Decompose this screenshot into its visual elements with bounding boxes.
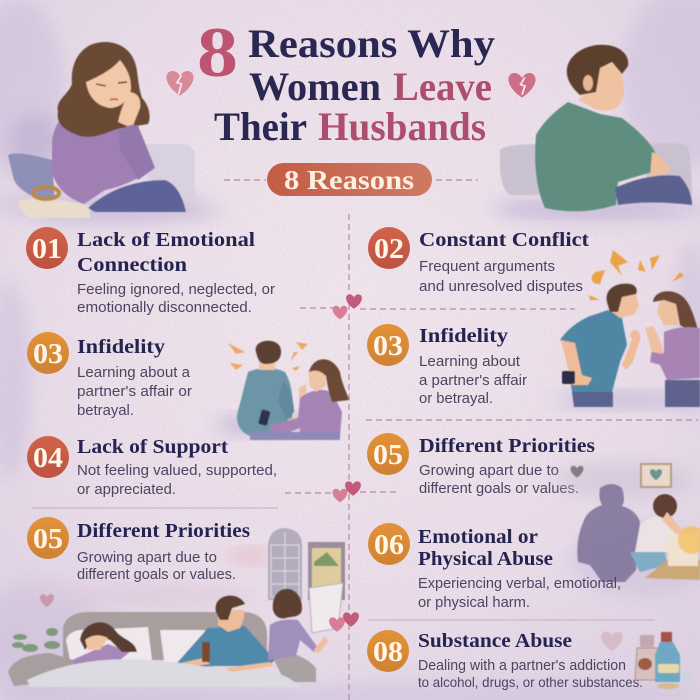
reason 03 left: 03: [33, 339, 63, 370]
illustration: couple with phone: [215, 341, 349, 440]
reason 03 right: Learning about: [419, 354, 520, 370]
decorative hearts: [329, 294, 362, 632]
reason 05 right: 05: [373, 440, 403, 471]
title: [197, 14, 495, 149]
reason 06: 06: [374, 530, 404, 561]
illustration: man on sofa: [500, 45, 692, 216]
pill: 8 Reasons: 8 Reasons: [284, 165, 414, 195]
reason 06: Physical Abuse: [418, 548, 553, 570]
reason 03 left: Infidelity: [77, 336, 166, 358]
reason 08: [367, 630, 643, 690]
illustration: shadow figure and upset woman: [555, 462, 700, 582]
title: Husbands: [318, 104, 486, 149]
reason 05 left: different goals or values.: [77, 567, 236, 583]
reason 01: 01: [32, 234, 62, 265]
reason 06: [368, 523, 621, 611]
reason 03 right: 03: [373, 331, 403, 362]
reason 03 left: betrayal.: [77, 403, 134, 419]
reason 05 left: Different Priorities: [77, 520, 250, 542]
reason 04: 04: [33, 443, 63, 474]
reason 08: Dealing with a partner's addiction: [418, 658, 626, 674]
reason 06: Emotional or: [418, 526, 538, 548]
reason 08: 08: [373, 637, 403, 668]
pill: 8 Reasons: [267, 163, 432, 196]
reason 01: Feeling ignored, neglected, or: [77, 282, 275, 298]
reason 05 left: 05: [33, 524, 63, 555]
reason 04: Lack of Support: [77, 436, 228, 458]
reason 03 left: [27, 332, 192, 419]
illustration: couple in bed: [8, 528, 345, 687]
title: Leave: [393, 64, 492, 109]
title: Women: [249, 64, 381, 109]
reason 03 right: [367, 324, 527, 407]
reason 05 left: Growing apart due to: [77, 550, 217, 566]
reason 03 right: or betrayal.: [419, 391, 493, 407]
reason 08: to alcohol, drugs, or other substances.: [418, 674, 643, 690]
reason 01: emotionally disconnected.: [77, 300, 252, 316]
divider lines: [224, 180, 698, 700]
reason 04: or appreciated.: [77, 482, 176, 498]
reason 04: [27, 436, 277, 498]
illustration: arguing couple: [553, 250, 700, 408]
reason 05 right: [367, 433, 595, 497]
title: Reasons Why: [248, 21, 495, 66]
reason 02: 02: [374, 234, 404, 265]
illustration: sad woman on sofa: [8, 42, 225, 218]
reason 05 right: different goals or values.: [419, 481, 579, 497]
icon: broken heart left: [166, 71, 194, 96]
reason 02: Frequent arguments: [419, 259, 555, 275]
reason 06: or physical harm.: [418, 595, 530, 611]
reason 02: [368, 227, 589, 295]
reason 03 right: a partner's affair: [419, 373, 527, 389]
reason 03 left: Learning about a: [77, 365, 191, 381]
title: 8: [197, 14, 238, 92]
reason 05 left: [27, 517, 250, 583]
reason 05 right: Different Priorities: [419, 435, 595, 457]
reason 04: Not feeling valued, supported,: [77, 463, 277, 479]
reason 05 right: Growing apart due to: [419, 463, 559, 479]
reason 01: Lack of Emotional: [77, 229, 255, 251]
reason 01: [26, 227, 275, 316]
reason 06: Experiencing verbal, emotional,: [418, 576, 621, 592]
reason 03 left: partner's affair or: [77, 384, 192, 400]
reason 03 right: Infidelity: [419, 325, 509, 347]
reason 02: Constant Conflict: [419, 229, 589, 251]
reason 08: Substance Abuse: [418, 630, 572, 652]
title: Their: [214, 104, 307, 149]
illustration: bottles and pale heart: [601, 632, 691, 689]
reason 02: and unresolved disputes: [419, 279, 583, 295]
icon: broken heart right: [508, 73, 536, 98]
reason 01: Connection: [77, 254, 188, 276]
